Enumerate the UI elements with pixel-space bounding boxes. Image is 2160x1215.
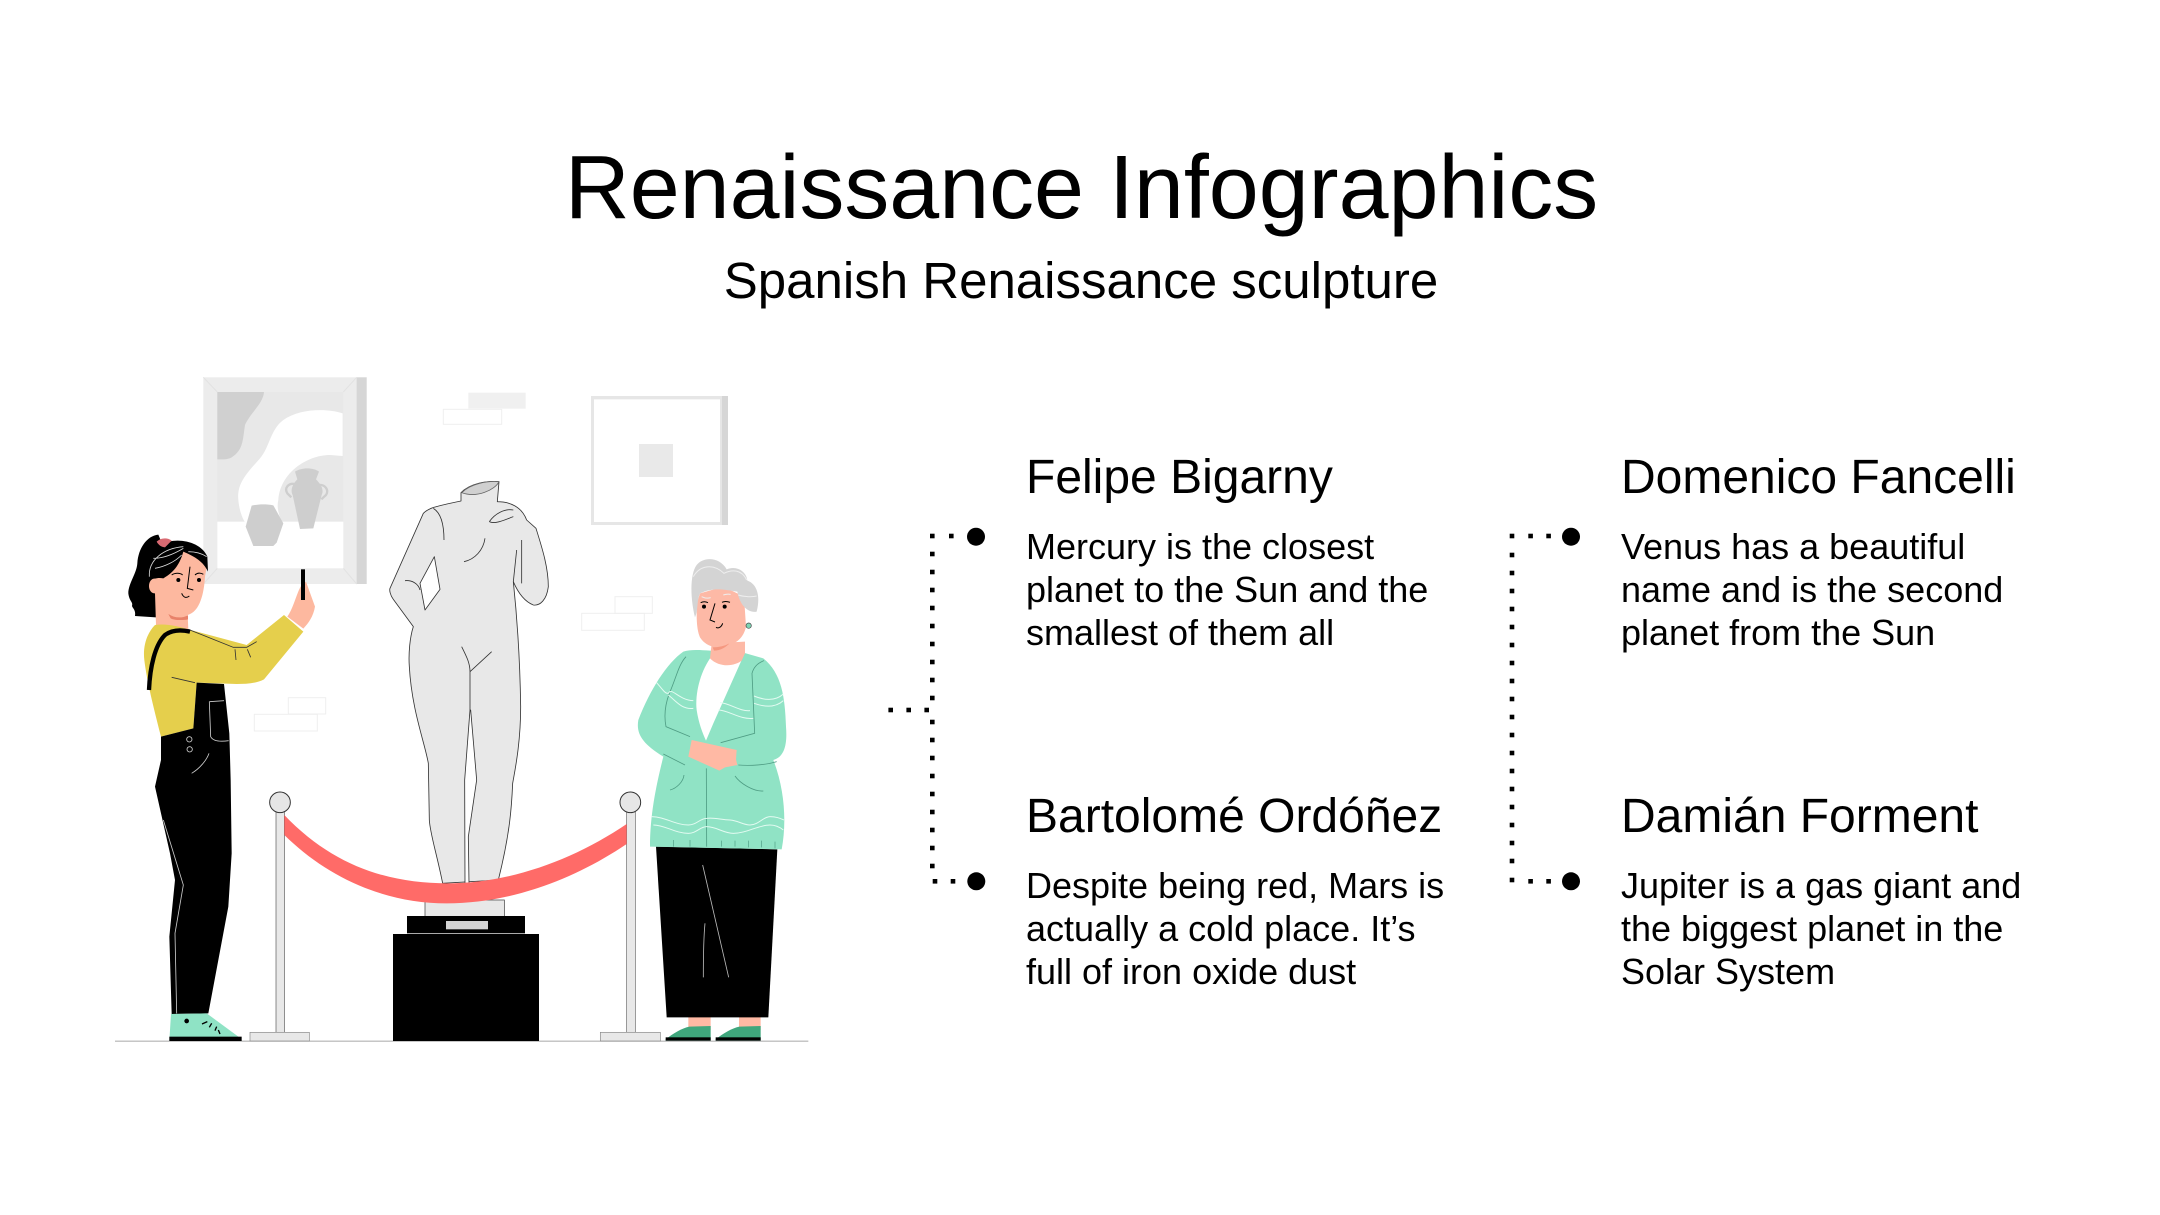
description: smallest of them all — [1026, 612, 1334, 653]
panel: Bartolomé Ordóñez — [1026, 790, 1444, 992]
overalls details — [163, 701, 229, 1013]
title: Renaissance Infographics — [565, 138, 1598, 238]
illustration: museum scene — [115, 377, 808, 1042]
face — [697, 587, 746, 647]
description: Mercury is the closest — [1026, 526, 1374, 567]
heading: Felipe Bigarny — [1026, 451, 1333, 504]
description: Despite being red, Mars is — [1026, 865, 1444, 906]
neck — [710, 642, 745, 665]
overalls — [155, 683, 232, 1014]
earring — [746, 623, 751, 628]
legs — [688, 1017, 761, 1030]
strap — [149, 630, 190, 690]
red rope — [284, 815, 627, 903]
connector: dotted bracket right column — [1510, 528, 1580, 890]
left stanchion — [250, 792, 309, 1041]
green shoes — [666, 1026, 761, 1041]
subtitle: Spanish Renaissance sculpture — [724, 252, 1438, 309]
connector: dotted bracket from illustration — [888, 528, 985, 890]
description: Venus has a beautiful — [1621, 526, 1965, 567]
small framed square — [591, 396, 728, 525]
ground line — [115, 1041, 808, 1042]
description: full of iron oxide dust — [1026, 951, 1356, 992]
cardigan seams — [663, 657, 777, 847]
heading: Bartolomé Ordóñez — [1026, 790, 1442, 843]
black trousers — [656, 847, 777, 1017]
heading: Domenico Fancelli — [1621, 451, 2016, 504]
description: Jupiter is a gas giant and — [1621, 865, 2021, 906]
panel: Domenico Fancelli — [1621, 451, 2016, 653]
facial features — [701, 601, 730, 628]
shoe — [169, 1013, 242, 1041]
description: planet from the Sun — [1621, 612, 1935, 653]
panel: Damián Forment — [1621, 790, 2021, 992]
face and neck — [152, 547, 207, 637]
hand and phone — [287, 569, 315, 629]
heading: Damián Forment — [1621, 790, 1978, 843]
ear — [149, 579, 160, 593]
description: Solar System — [1621, 951, 1835, 992]
panel: Felipe Bigarny — [1026, 451, 1428, 653]
headless statue — [390, 481, 548, 883]
grey hair — [691, 559, 758, 617]
cardigan — [638, 650, 786, 849]
description: the biggest planet in the — [1621, 908, 2003, 949]
wall bricks upper — [254, 393, 652, 731]
description: planet to the Sun and the — [1026, 569, 1428, 610]
ponytail and hair back — [128, 535, 167, 617]
front hair — [149, 541, 208, 582]
description: name and is the second — [1621, 569, 2003, 610]
framed painting with vases — [203, 377, 367, 584]
yellow sweater — [144, 615, 303, 737]
hands — [688, 740, 737, 771]
sculpture pedestal — [393, 900, 539, 1041]
description: actually a cold place. It’s — [1026, 908, 1416, 949]
right stanchion — [600, 792, 660, 1041]
older woman visitor — [638, 559, 786, 1041]
white shirt — [696, 658, 742, 741]
girl with phone — [128, 535, 315, 1041]
facial features — [172, 567, 203, 597]
